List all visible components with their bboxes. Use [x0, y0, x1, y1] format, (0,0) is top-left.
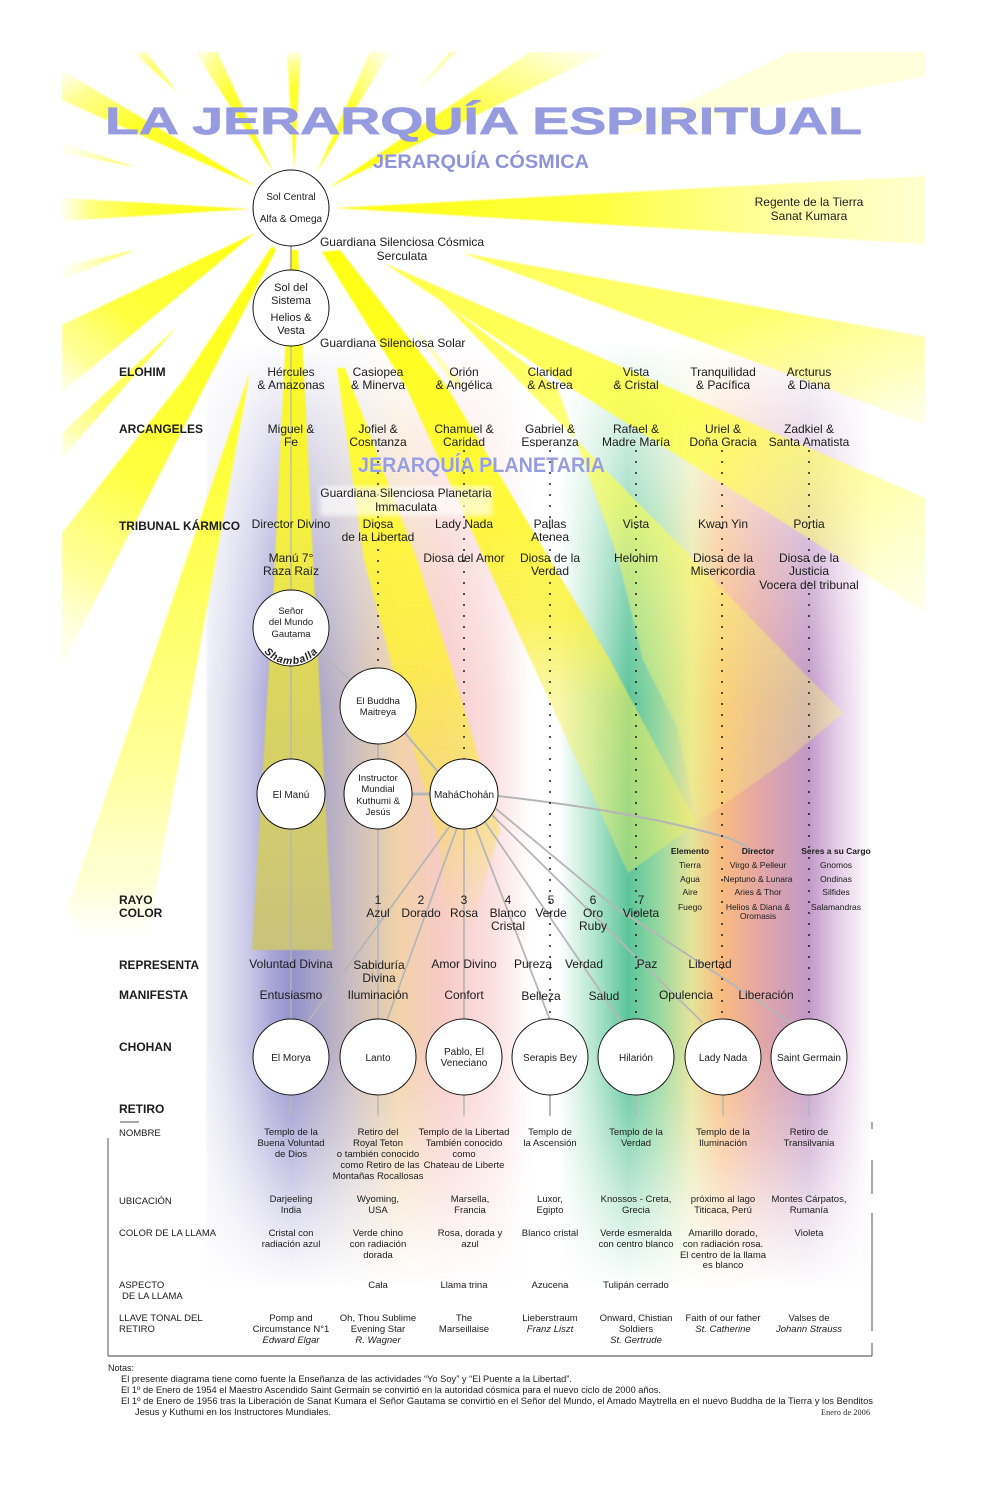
text: notes: El 1º de Enero de 1954 el Maestro Ascendido Saint Germain se convirtió en la autoridad cósmica para el nuevo ciclo de 2000 años.	[121, 1385, 661, 1395]
table: Elemento, Director, Seres a su Cargo: Tierra	[679, 860, 701, 870]
row: Elohim: Arcturus	[787, 365, 831, 379]
row: Chohan circles: Saint Germain	[777, 1053, 841, 1064]
circle: El Buddha Maitreya: Maitreya	[360, 707, 397, 718]
row: Rayo / Color	[119, 893, 660, 933]
row: Llave tonal del retiro: Onward, Chistian	[600, 1313, 672, 1324]
text: Regente de la Tierra: Regente de la Tierra	[755, 195, 864, 209]
row: Nombre: Templo de	[528, 1127, 572, 1138]
row: Llave tonal del retiro: Pomp and	[269, 1313, 313, 1324]
row: Aspecto de la llama: Cala	[368, 1280, 388, 1291]
row: Rayo / Color: Azul	[366, 906, 390, 920]
label: Chohan: CHOHAN	[119, 1040, 172, 1054]
row: Rayo / Color: 5	[548, 893, 555, 907]
row: Representa: Paz	[637, 957, 657, 971]
row: Color de la llama: Cristal con	[269, 1228, 313, 1239]
row: Tribunal Kármico: Manú 7°	[269, 551, 314, 565]
circle: Instructor Mundial	[344, 759, 412, 829]
text: notes: Jesus y Kuthumi en los Instructores Mundiales.	[135, 1407, 331, 1417]
text: Guardiana Silenciosa Planetaria	[320, 486, 492, 516]
row: Manifiesta: Opulencia	[659, 988, 713, 1002]
text: notes: Notas:	[108, 1363, 134, 1373]
row: Llave tonal del retiro: Circumstance N°1	[253, 1324, 329, 1335]
row: Elohim: & Amazonas	[257, 378, 325, 392]
row: Llave tonal del retiro: Valses de	[788, 1313, 830, 1324]
row: Aspecto de la llama: ASPECTO	[119, 1280, 164, 1291]
text: Guardiana Silenciosa Cósmica	[320, 235, 484, 263]
row: Llave tonal del retiro: Oh, Thou Sublime	[340, 1313, 416, 1324]
circle: Instructor Mundial: Jesús	[366, 807, 391, 818]
row: Rayo / Color: COLOR	[119, 906, 163, 920]
text: Guardiana Silenciosa Planetaria: Immaculata	[375, 500, 437, 514]
row: Nombre: Retiro de	[790, 1127, 828, 1138]
row: Representa: Amor Divino	[431, 957, 497, 971]
row: Aspecto de la llama: Llama trina	[440, 1280, 488, 1291]
row: Elohim: Orión	[449, 365, 479, 379]
row: Tribunal Kármico: Diosa del Amor	[423, 551, 505, 565]
row: Rayo / Color: Dorado	[401, 906, 441, 920]
circle: El Buddha Maitreya: El Buddha	[356, 696, 401, 707]
sun rays	[62, 52, 925, 950]
label: Retiro: RETIRO	[119, 1102, 164, 1116]
background: colour spectrum columns	[205, 340, 872, 1290]
row: Color de la llama: con radiación	[350, 1239, 406, 1250]
row: Nombre: Verdad	[621, 1138, 651, 1149]
row: Manifiesta: Entusiasmo	[260, 988, 323, 1002]
row: Llave tonal del retiro: Johann Strauss	[775, 1324, 842, 1335]
row: Llave tonal del retiro: Edward Elgar	[262, 1335, 320, 1346]
row: Chohan circles: Lady Nada	[699, 1053, 748, 1064]
row: Elohim: Casiopea	[353, 365, 404, 379]
row: Llave tonal del retiro: Franz Liszt	[527, 1324, 574, 1335]
row: Tribunal Kármico: Vista	[623, 517, 650, 531]
row: Ubicación: próximo al lago	[691, 1194, 755, 1205]
row: Llave tonal del retiro: Soldiers	[619, 1324, 653, 1335]
row: Tribunal Kármico: Raza Raíz	[263, 564, 319, 578]
row: Ubicación: Knossos - Creta,	[601, 1194, 671, 1205]
row: Representa: Verdad	[565, 957, 603, 971]
row: Ubicación: Francia	[454, 1205, 487, 1216]
title: LA JERARQUÍA ESPIRITUAL	[105, 99, 862, 143]
frame: retiro table border	[108, 1122, 872, 1356]
row: Elohim: Vista	[623, 365, 650, 379]
row: Tribunal Kármico: Misericordia	[691, 564, 756, 578]
row: Tribunal Kármico: Verdad	[531, 564, 569, 578]
row: Ubicación: USA	[368, 1205, 388, 1216]
row: Color de la llama	[119, 1228, 824, 1271]
table: Elemento, Director, Seres a su Cargo: Silfides	[822, 887, 850, 897]
row: Color de la llama: dorada	[363, 1250, 394, 1261]
row: Tribunal Kármico: Director Divino	[252, 517, 331, 531]
row: Ubicación: Grecia	[622, 1205, 651, 1216]
circle: Instructor Mundial: Mundial	[361, 784, 395, 795]
row: Arcangeles: ARCANGELES	[119, 422, 203, 436]
row: Nombre: Retiro del	[358, 1127, 398, 1138]
row: Representa	[120, 960, 731, 982]
row: Tribunal Kármico: Helohim	[614, 551, 658, 565]
row: Nombre: Templo de la	[696, 1127, 751, 1138]
row: Nombre: de Dios	[275, 1149, 307, 1160]
row: Chohan circles: Pablo, El	[444, 1047, 484, 1058]
table: Elemento, Director, Seres a su Cargo: Aries & Thor	[734, 887, 782, 897]
row: Llave tonal del retiro: LLAVE TONAL DEL	[119, 1313, 203, 1324]
row: Tribunal Kármico: de la Libertad	[342, 530, 414, 544]
row: Chohan circles: Veneciano	[441, 1058, 488, 1069]
table: Elemento, Director, Seres a su Cargo: Director	[742, 846, 775, 856]
row: Color de la llama: Verde chino	[353, 1228, 403, 1239]
row: Arcangeles: Miguel &	[268, 422, 314, 436]
text: notes	[108, 1363, 874, 1417]
row: Elohim: & Diana	[788, 378, 831, 392]
row: Llave tonal del retiro: The	[456, 1313, 472, 1324]
row: Arcangeles: Cosntanza	[349, 435, 407, 449]
row: Color de la llama: Verde esmeralda	[600, 1228, 673, 1239]
row: Arcangeles: Madre María	[602, 435, 670, 449]
row: Elohim	[119, 365, 831, 392]
table: Elemento, Director, Seres a su Cargo: Neptuno & Lunara	[724, 874, 793, 884]
row: Ubicación: Rumanía	[790, 1205, 829, 1216]
row: Rayo / Color: Rosa	[450, 906, 478, 920]
row: Arcangeles: Zadkiel &	[784, 422, 834, 436]
row: Nombre: como Retiro de las	[340, 1160, 420, 1171]
row: Tribunal Kármico: Diosa de la	[693, 551, 753, 565]
row: Arcangeles: Doña Gracia	[689, 435, 757, 449]
table: Elemento, Director, Seres a su Cargo: Agua	[680, 874, 700, 884]
row: Color de la llama: radiación azul	[262, 1239, 320, 1250]
row: Elohim: & Angélica	[436, 378, 493, 392]
row: Nombre: También conocido	[426, 1138, 502, 1149]
row: Nombre: Templo de la Libertad	[419, 1127, 509, 1138]
row: Tribunal Kármico: TRIBUNAL KÁRMICO	[119, 518, 240, 533]
row: Rayo / Color: RAYO	[119, 893, 153, 907]
row: Aspecto de la llama: Azucena	[532, 1280, 569, 1291]
row: Nombre	[119, 1127, 835, 1182]
row: Llave tonal del retiro: Faith of our father	[686, 1313, 760, 1324]
row: Ubicación: Luxor,	[537, 1194, 563, 1205]
circle: Señor del Mundo	[252, 590, 330, 666]
row: Chohan circles: Serapis Bey	[523, 1053, 577, 1064]
table: Elemento, Director, Seres a su Cargo	[671, 846, 871, 921]
row: Ubicación: Marsella,	[451, 1194, 489, 1205]
row: Nombre: Iluminación	[699, 1138, 747, 1149]
row: Chohan circles: El Morya	[271, 1053, 311, 1064]
row: Rayo / Color: Verde	[535, 906, 567, 920]
row: Manifiesta	[119, 988, 794, 1003]
row: Ubicación: UBICACIÓN	[119, 1196, 172, 1207]
row: Nombre: Transilvania	[784, 1138, 835, 1149]
row: Color de la llama: con centro blanco	[598, 1239, 674, 1250]
row: Arcangeles: Jofiel &	[358, 422, 398, 436]
row: Rayo / Color: 2	[418, 893, 425, 907]
heading: Jerarquía Planetaria: JERARQUÍA PLANETARIA	[358, 454, 605, 477]
row: Tribunal Kármico	[119, 517, 859, 592]
row: Tribunal Kármico: Atenea	[531, 530, 569, 544]
row: Ubicación	[119, 1194, 846, 1216]
row: Elohim: ELOHIM	[119, 365, 166, 379]
row: Chohan circles: Hilarión	[619, 1053, 653, 1064]
dotted vertical guide lines	[378, 450, 809, 1018]
row: Llave tonal del retiro: St. Gertrude	[610, 1335, 662, 1346]
text: Guardiana Silenciosa Solar: Guardiana Silenciosa Solar	[320, 336, 465, 350]
row: Color de la llama: COLOR DE LA LLAMA	[119, 1228, 217, 1239]
row: Rayo / Color: Cristal	[491, 919, 525, 933]
row: Representa: Voluntad Divina	[249, 957, 333, 971]
row: Color de la llama: Violeta	[795, 1228, 824, 1239]
row: Chohan circles	[253, 1019, 847, 1095]
row: Rayo / Color: Ruby	[579, 919, 607, 933]
row: Manifiesta: Salud	[589, 989, 619, 1003]
row: Elohim: & Cristal	[613, 378, 659, 392]
row: Tribunal Kármico: Diosa de la	[779, 551, 839, 565]
row: Elohim: & Minerva	[351, 378, 405, 392]
circle: Sol del Sistema: Sol del	[274, 282, 308, 294]
circle: El Buddha Maitreya	[340, 668, 416, 744]
circle: Sol del Sistema: Sistema	[271, 295, 312, 307]
table: Elemento, Director, Seres a su Cargo: Oromasis	[740, 911, 776, 921]
circle: Señor del Mundo: del Mundo	[269, 617, 313, 628]
row: Arcangeles	[119, 424, 850, 447]
row: Tribunal Kármico: Pallas	[534, 517, 566, 531]
row: Manifiesta: MANIFESTA	[119, 988, 188, 1002]
row: Rayo / Color: Blanco	[490, 906, 527, 920]
text: Regente de la Tierra	[755, 195, 864, 223]
row: Aspecto de la llama: Tulipán cerrado	[603, 1280, 669, 1291]
circle: Señor del Mundo: Shamballa	[264, 648, 318, 664]
row: Tribunal Kármico: Diosa	[363, 517, 394, 531]
row: Arcangeles: Santa Amatista	[769, 435, 850, 449]
row: Llave tonal del retiro: R. Wagner	[355, 1335, 401, 1346]
row: Llave tonal del retiro: Marseillaise	[439, 1324, 489, 1335]
row: Arcangeles: Rafael &	[613, 422, 659, 436]
table: Elemento, Director, Seres a su Cargo: Elemento	[671, 846, 709, 856]
row: Nombre: NOMBRE	[119, 1128, 161, 1139]
row: Aspecto de la llama	[119, 1280, 669, 1302]
circle: Sol Central: Sol Central	[266, 192, 316, 203]
row: Ubicación: Egipto	[537, 1205, 563, 1216]
row: Arcangeles: Uriel &	[705, 422, 741, 436]
row: Elohim: & Astrea	[527, 378, 573, 392]
row: Rayo / Color: 1	[375, 893, 382, 907]
table: Elemento, Director, Seres a su Cargo: Fuego	[678, 902, 702, 912]
table: Elemento, Director, Seres a su Cargo: Aire	[682, 887, 698, 897]
table: Elemento, Director, Seres a su Cargo: Seres a su Cargo	[801, 846, 871, 856]
row: Llave tonal del retiro: RETIRO	[119, 1324, 155, 1335]
text: Guardiana Silenciosa Cósmica: Serculata	[377, 249, 428, 263]
row: Tribunal Kármico: Diosa de la	[520, 551, 580, 565]
circle: Sol del Sistema: Helios &	[271, 312, 312, 324]
row: Tribunal Kármico: Portia	[793, 517, 825, 531]
text: date: Enero de 2006	[821, 1408, 870, 1417]
row: Llave tonal del retiro: Lieberstraum	[522, 1313, 578, 1324]
circle: El Manú: El Manú	[273, 790, 309, 801]
circle: MaháChohán	[430, 759, 498, 829]
row: Rayo / Color: 4	[505, 893, 512, 907]
row: Arcangeles: Caridad	[443, 435, 485, 449]
row: Manifiesta: Confort	[444, 988, 484, 1002]
circle: Instructor Mundial: Instructor	[358, 773, 398, 784]
row: Ubicación: Darjeeling	[270, 1194, 312, 1205]
row: Tribunal Kármico: Justicia	[789, 564, 829, 578]
row: Nombre: como	[452, 1149, 476, 1160]
row: Aspecto de la llama: DE LA LLAMA	[122, 1291, 183, 1302]
circle: Instructor Mundial: Kuthumi &	[356, 796, 401, 807]
text: notes: El presente diagrama tiene como fuente la Enseñanza de las actividades “Yo Soy” y “El Puente a la Libertad”.	[121, 1374, 572, 1384]
row: Elohim: Tranquilidad	[690, 365, 756, 379]
table: Elemento, Director, Seres a su Cargo: Salamandras	[811, 902, 861, 912]
row: Representa: Libertad	[688, 957, 732, 971]
row: Chohan circles: Lanto	[365, 1053, 391, 1064]
row: Elohim: Hércules	[267, 365, 315, 379]
row: Elohim: Claridad	[528, 365, 572, 379]
row: Color de la llama: azul	[461, 1239, 479, 1250]
row: Manifiesta: Iluminación	[348, 988, 408, 1002]
row: Representa: Pureza	[514, 957, 552, 971]
row: Rayo / Color: Violeta	[623, 906, 660, 920]
row: Rayo / Color: 3	[461, 893, 468, 907]
row: Arcangeles: Esperanza	[521, 435, 579, 449]
circle: El Manú	[257, 759, 325, 829]
row: Manifiesta: Belleza	[521, 989, 561, 1003]
row: Nombre: Templo de la	[264, 1127, 319, 1138]
row: Color de la llama: Blanco cristal	[522, 1228, 578, 1239]
row: Color de la llama: es blanco	[703, 1260, 743, 1271]
row: Rayo / Color: 6	[590, 893, 597, 907]
row: Ubicación: Wyoming,	[357, 1194, 399, 1205]
row: Tribunal Kármico: Vocera del tribunal	[759, 578, 859, 592]
row: Ubicación: Titicaca, Perú	[694, 1205, 752, 1216]
circle: Sol Central	[253, 170, 329, 246]
row: Nombre: Royal Teton	[353, 1138, 403, 1149]
table: Elemento, Director, Seres a su Cargo: Helios & Diana &	[726, 902, 790, 912]
row: Manifiesta: Liberación	[738, 988, 794, 1002]
row: Elohim: & Pacífica	[696, 378, 750, 392]
text: Guardiana Silenciosa Cósmica: Guardiana Silenciosa Cósmica	[320, 235, 484, 249]
text: notes: El 1º de Enero de 1956 tras la Liberación de Sanat Kumara el Señor Gautama se convirtió en el Señor del Mundo, el Amado Maytrella en el nuevo Buddha de la Tierra y los Benditos	[121, 1396, 874, 1406]
table: Elemento, Director, Seres a su Cargo: Virgo & Pelleur	[730, 860, 786, 870]
circle: Señor del Mundo: Gautama	[271, 629, 311, 640]
circle: Sol Central: Alfa & Omega	[260, 214, 323, 225]
row: Llave tonal del retiro: Evening Star	[351, 1324, 405, 1335]
row: Nombre: Templo de la	[609, 1127, 664, 1138]
circle: Sol del Sistema: Vesta	[277, 325, 306, 337]
text: Regente de la Tierra: Sanat Kumara	[771, 209, 848, 223]
circle: MaháChohán: MaháChohán	[434, 790, 494, 801]
row: Ubicación: India	[281, 1205, 302, 1216]
row: Nombre: o también conocido	[337, 1149, 419, 1160]
row: Representa: Sabiduría	[353, 958, 405, 972]
row: Color de la llama: El centro de la llama	[680, 1250, 767, 1261]
row: Rayo / Color: 7	[638, 893, 645, 907]
circle: Sol del Sistema	[253, 270, 329, 346]
row: Arcangeles: Fe	[284, 435, 298, 449]
text: Guardiana Silenciosa Planetaria: Guardiana Silenciosa Planetaria	[320, 486, 492, 500]
row: Rayo / Color: Oro	[583, 906, 603, 920]
table: Elemento, Director, Seres a su Cargo: Ondinas	[820, 874, 852, 884]
row: Arcangeles: Chamuel &	[434, 422, 494, 436]
row: Llave tonal del retiro: St. Catherine	[695, 1324, 751, 1335]
row: Nombre: Montañas Rocallosas	[333, 1171, 424, 1182]
connector lines	[291, 246, 809, 1115]
row: Nombre: Chateau de Liberte	[424, 1160, 504, 1171]
row: Color de la llama: Rosa, dorada y	[438, 1228, 502, 1239]
row: Color de la llama: Amarillo dorado,	[688, 1228, 758, 1239]
row: Tribunal Kármico: Kwan Yin	[698, 517, 748, 531]
row: Nombre: Buena Voluntad	[257, 1138, 325, 1149]
row: Arcangeles: Gabriel &	[525, 422, 575, 436]
row: Llave tonal del retiro	[119, 1313, 842, 1346]
heading: Jerarquía Cósmica: JERARQUÍA CÓSMICA	[373, 151, 589, 173]
row: Representa: Divina	[362, 971, 396, 985]
circle: Señor del Mundo: Señor	[278, 606, 304, 617]
row: Representa: REPRESENTA	[119, 958, 199, 972]
row: Tribunal Kármico: Lady Nada	[435, 517, 493, 531]
row: Nombre: la Ascensión	[523, 1138, 577, 1149]
table: Elemento, Director, Seres a su Cargo: Gnomos	[820, 860, 852, 870]
row: Ubicación: Montes Cárpatos,	[772, 1194, 846, 1205]
row: Color de la llama: con radiación rosa.	[683, 1239, 763, 1250]
